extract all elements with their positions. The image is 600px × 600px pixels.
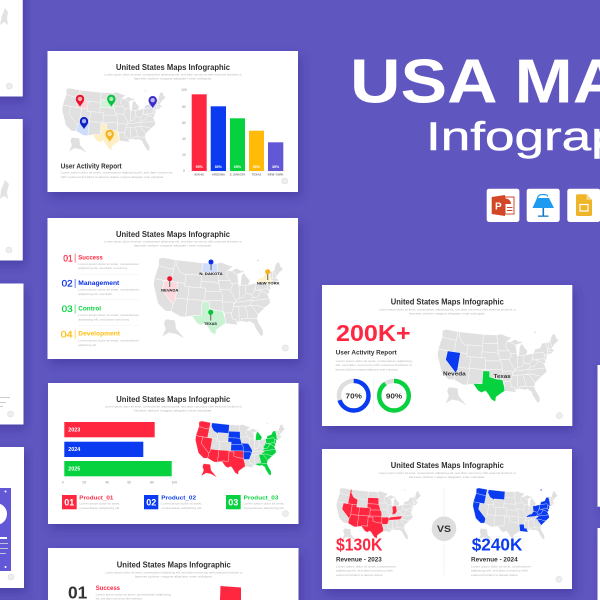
US map: red regions (336, 488, 421, 541)
US map with highlighted states (154, 257, 283, 339)
report text (61, 170, 173, 179)
intro text (104, 240, 242, 248)
legend: Product_02: Lorem ipsum dolor sit amet, (161, 502, 202, 506)
list item: Development: adipiscing elit (78, 343, 96, 347)
icon: Keynote (527, 189, 560, 222)
red state (220, 586, 241, 600)
US map with highlighted states (62, 88, 166, 153)
panel: cropped slide right 2 (598, 528, 600, 600)
US map with Nevada and Texas (438, 329, 559, 406)
item: Success (96, 585, 171, 600)
intro text: laoreet dolore magna aliquam erat volutpat. (134, 76, 212, 80)
heading: United States Maps Infographic (117, 561, 231, 570)
label: Texas: Texas (494, 374, 511, 380)
icon: slide logo (282, 178, 288, 184)
bar chart: NEW YORK (268, 172, 284, 176)
revenue 2023: Revenue - 2023 (336, 558, 382, 564)
list item: Development: 04 (61, 330, 73, 340)
US map: blue regions (473, 488, 558, 541)
horizontal bar chart: 80 (150, 480, 154, 484)
revenue 2023: $130K (336, 535, 383, 555)
bar chart: 100 (181, 88, 187, 92)
report text: nibh euismod tincidunt ut laoreet dolore magna aliquam erat volutpat. (61, 175, 164, 179)
report text: elit, sed diam nonummy nibh euismod tincidunt ut (336, 363, 412, 367)
bar chart: 60 (182, 121, 186, 125)
label: Nevada: Neveda (443, 372, 467, 378)
list item: Success: adipiscing elit, sed diam nonummy (78, 266, 128, 270)
legend: Product_03: Lorem ipsum dolor sit amet, (244, 502, 285, 506)
donut: 90% (379, 381, 409, 411)
panel: horizontal bars and map slide (48, 383, 298, 524)
panel: numbered list and pinned map slide (48, 218, 298, 359)
panel: revenue comparison slide (322, 449, 572, 589)
map pin: North Dakota (199, 260, 223, 276)
intro text: Lorem ipsum dolor sit amet, consectetuer adipiscing elit, sed diam nonummy nibh euismod tincidunt ut (379, 307, 516, 311)
intro text (104, 72, 242, 80)
revenue 2023: adipiscing elit, sed diam nonummy nibh (336, 569, 393, 573)
icon: slide logo (282, 345, 288, 351)
intro text: laoreet dolore magna aliquam erat volutpat. (135, 574, 213, 578)
icon: Google Slides (567, 189, 600, 222)
item: Success: Lorem ipsum dolor sit amet, consectetuer adipiscing (96, 592, 171, 596)
big number: 200K+ (336, 320, 411, 346)
list item: Control: Lorem ipsum dolor sit amet, consectetuer (78, 313, 139, 317)
bar chart: 80% (215, 165, 223, 169)
bar chart: ARIZONA (212, 172, 226, 176)
legend: Product_01: Product_01 (79, 496, 114, 502)
VS badge (432, 516, 456, 541)
list item: Management: adipiscing elit, sed diam (78, 292, 113, 296)
report text: Lorem ipsum dolor sit amet, consectetuer adipiscing (336, 359, 412, 363)
list item: Management (62, 278, 139, 300)
bar chart: IDAHO (195, 172, 205, 176)
bar chart: 20 (182, 153, 186, 157)
legend: Product_01: consectetuer adipiscing elit (79, 506, 119, 510)
report heading: User Activity Report (336, 350, 397, 357)
legend: Product_01: Lorem ipsum dolor sit amet, (79, 502, 120, 506)
list item: Development: Development (78, 331, 121, 338)
donut: 70%: 70% (346, 391, 362, 400)
list item: Success (63, 253, 139, 274)
map pin: Nevada: NEVADA (161, 289, 179, 293)
US map with coloured regions (195, 421, 285, 477)
legend: Product_03: Product_03 (244, 496, 279, 502)
horizontal bar chart: 2024 (68, 447, 80, 453)
intro text: laoreet dolore magna aliquam erat volutpat. (409, 475, 486, 479)
revenue 2023: euismod tincidunt ut laoreet dolore (336, 573, 383, 577)
horizontal bar chart: 0 (62, 480, 64, 484)
icon: PowerPoint (487, 189, 519, 222)
panel: 200K+ user activity slide (322, 285, 572, 426)
item: Success: Success (96, 585, 121, 592)
list item: Success: Success (78, 255, 103, 262)
horizontal bar chart: 2023 (68, 428, 80, 434)
list item: Management: Lorem ipsum dolor sit amet, consectetuer (78, 288, 139, 292)
donut: 90%: 90% (386, 391, 403, 400)
bar chart: 35% (272, 165, 280, 169)
legend: Product_03: 03 (228, 497, 238, 507)
horizontal bar chart (62, 422, 177, 484)
heading: United States Maps Infographic (391, 298, 504, 307)
horizontal bar chart: 20 (82, 480, 86, 484)
horizontal bar chart: 100 (171, 480, 177, 484)
map pin: Nevada (161, 276, 179, 293)
list item: Control: Control (78, 306, 101, 312)
report text: Lorem ipsum dolor sit amet, consectetuer adipiscing elit, sed diam nonummy (61, 170, 173, 174)
list item: Management: Management (78, 280, 120, 287)
intro text: laoreet dolore magna aliquam erat volutpat. (409, 311, 486, 315)
legend: Product_02: 02 (146, 497, 156, 507)
list item: Control: adipiscing elit, sed diam nonummy (78, 318, 130, 322)
report heading: User Activity Report (61, 161, 122, 170)
list item: Success: 01 (63, 253, 73, 264)
bar chart: S. DAKOTA (230, 172, 246, 176)
report text (336, 359, 412, 371)
legend: Product_01: 01 (64, 497, 74, 507)
map pin: North Dakota: N. DAKOTA (199, 272, 223, 276)
horizontal bar chart: 2025 (68, 467, 80, 473)
map pin: New York (257, 269, 280, 286)
revenue 2023 (336, 535, 396, 577)
panel: cropped slide right 1 (598, 365, 600, 507)
revenue 2024: Revenue - 2024 (471, 558, 518, 564)
map pin: Texas: TEXAS (204, 322, 217, 326)
intro text (379, 471, 516, 479)
map pin: red (76, 95, 84, 107)
map pin: Texas (204, 310, 217, 326)
bar chart: 65% (234, 165, 242, 169)
intro text: laoreet dolore magna aliquam erat volutpat. (134, 244, 212, 248)
list item: Development (61, 330, 139, 347)
revenue 2024: Lorem ipsum dolor sit amet, consectetuer (471, 565, 531, 569)
map pin: yellow (106, 130, 114, 142)
bar chart: 95% (196, 165, 204, 169)
bar chart: TEXAS (252, 172, 261, 176)
heading: United States Maps Infographic (116, 230, 230, 239)
legend: Product_02: Product_02 (161, 496, 196, 502)
intro text: Lorem ipsum dolor sit amet, consectetuer adipiscing elit, sed diam nonummy nibh euismod tincidunt ut (104, 240, 242, 244)
legend: Product_02: consectetuer adipiscing elit (161, 506, 201, 510)
icon: slide logo (282, 510, 288, 516)
VS badge: VS (437, 524, 451, 534)
intro text: Lorem ipsum dolor sit amet, consectetuer adipiscing elit, sed diam nonummy nibh euismod tincidunt ut (379, 471, 516, 475)
horizontal bar chart: 60 (127, 480, 131, 484)
legend: Product_03: consectetuer adipiscing elit (244, 506, 284, 510)
intro text: Lorem ipsum dolor sit amet, consectetuer adipiscing elit, sed diam nonummy nibh euismod tincidunt ut (104, 72, 242, 76)
legend: Product_01 (62, 495, 120, 510)
donut: 70% (339, 381, 369, 411)
intro text (105, 570, 242, 578)
horizontal bar chart: 40 (105, 480, 109, 484)
bar chart (181, 88, 285, 176)
title (350, 48, 600, 159)
list item: Success: Lorem ipsum dolor sit amet, consectetuer (78, 262, 139, 266)
icon: PowerPoint: P (495, 202, 502, 212)
panel: cropped slide left 4 (0, 447, 24, 588)
intro text (105, 404, 242, 412)
panel: cropped list slide (48, 548, 298, 600)
heading: United States Maps Infographic (116, 395, 231, 404)
bar chart: 0 (183, 169, 185, 173)
map pin: blue (80, 117, 88, 129)
bar chart: 50% (253, 165, 261, 169)
revenue 2024: $240K (472, 535, 523, 555)
legend: Product_03 (226, 495, 285, 510)
heading: United States Maps Infographic (391, 461, 504, 470)
list item: Control: 03 (62, 304, 73, 315)
icon: slide logo (556, 576, 562, 582)
bar chart: 80 (182, 105, 186, 109)
bar chart: 40 (182, 137, 186, 141)
revenue 2024: euismod tincidunt ut laoreet dolore (471, 573, 518, 577)
intro text: Lorem ipsum dolor sit amet, consectetuer adipiscing elit, sed diam nonummy nibh euismod tincidunt ut (105, 404, 242, 408)
map pin: green (107, 95, 116, 107)
panel: cropped slide left 3 (0, 284, 24, 424)
icon: slide logo (556, 413, 562, 419)
map pin: New York: NEW YORK (257, 282, 280, 286)
panel: cropped slide left 2 (0, 119, 23, 260)
revenue 2024 (471, 535, 531, 577)
list item: Development: Lorem ipsum dolor sit amet, consectetuer (78, 338, 139, 342)
legend: Product_02 (144, 495, 202, 510)
heading: United States Maps Infographic (116, 63, 230, 72)
map pin: purple (148, 96, 157, 108)
revenue 2024: adipiscing elit, sed diam nonummy nibh (471, 569, 528, 573)
intro text (379, 307, 516, 315)
intro text: Lorem ipsum dolor sit amet, consectetuer adipiscing elit, sed diam nonummy nibh euismod tincidunt ut (105, 570, 242, 574)
panel: cropped slide left 1 (0, 0, 23, 96)
report text: laoreet dolore magna aliquam erat volutpat. (336, 367, 399, 371)
list item: Management: 02 (62, 278, 73, 290)
intro text: laoreet dolore magna aliquam erat volutpat. (134, 408, 213, 412)
revenue 2023: Lorem ipsum dolor sit amet, consectetuer (336, 565, 396, 569)
panel: map and bar chart slide (48, 51, 298, 192)
list item: Control (62, 304, 139, 325)
